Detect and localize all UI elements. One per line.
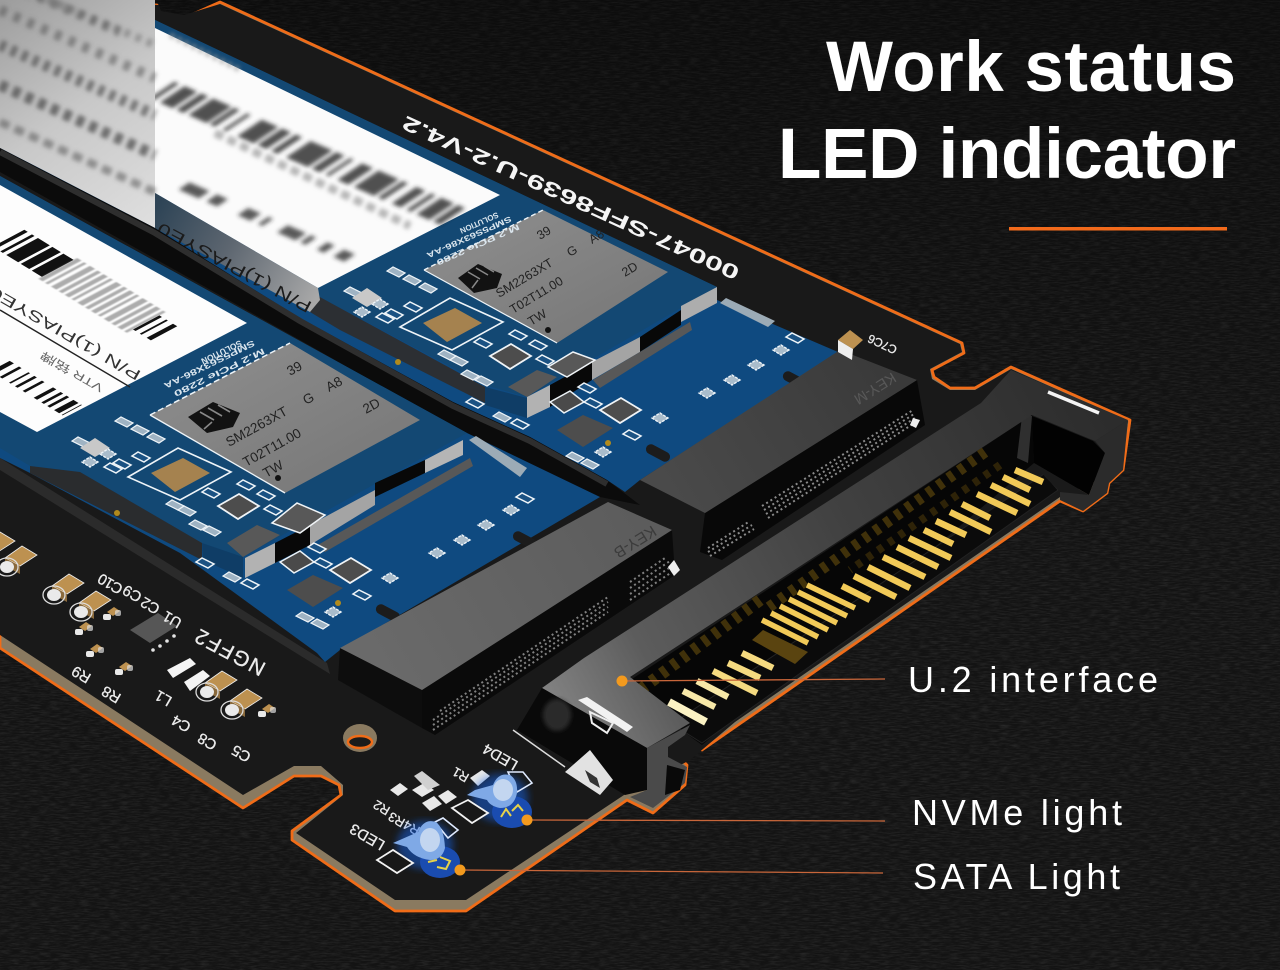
title [778,28,1236,194]
connector latch highlight [668,560,680,576]
sticker [0,185,247,432]
card edge shadow [0,458,330,674]
gold fingers [669,470,1043,722]
upper M.2 SSD card [0,0,838,492]
chip U1 [130,613,177,652]
chip logo [188,402,240,433]
chip markings: TW [260,457,286,481]
connector front [422,530,675,735]
silkscreen labels: C2 [138,593,163,617]
silkscreen labels: U1 [160,607,185,631]
module part text [162,338,267,399]
footprint [377,850,413,873]
module part text: SOLUTION [200,338,244,366]
barcode [0,238,168,410]
body [467,774,517,808]
dark gap [0,148,640,505]
board model text: 00047-SFF8639-U.2-V4.2 [399,111,743,283]
blurred barcodes [162,35,455,258]
connector top bar [542,370,1128,748]
connector front [700,380,925,560]
body [393,821,445,860]
connector latch highlight [910,418,920,428]
module part text: M.2 PCIe 2280 [172,346,267,399]
connector side [338,648,422,728]
left end side [630,725,690,808]
lens [420,846,460,878]
U.2 connector [513,370,1128,808]
silkscreen labels: C5 [229,741,254,765]
finger tongue [672,474,1058,743]
small resistors [75,607,276,717]
silkscreen labels: R3 [386,809,408,830]
module part text: M.2 PCIe 2280 [434,222,521,267]
reflected part number: P/N (1)PIASYE0 [154,219,315,316]
surface mount components [0,330,899,853]
contact dots [433,558,672,730]
sticker [155,28,500,288]
plate side band [30,466,202,560]
callout: U.2 interface [616,659,1158,700]
silkscreen labels: L1 [152,686,175,709]
silkscreen labels: R4 [401,817,422,838]
callout: U.2 interface: U.2 interface [908,659,1158,700]
outlined block [272,503,325,533]
footprint [452,800,488,823]
KEY-B label: KEY-B [610,522,659,561]
chip markings: G [564,243,580,260]
chip edge lines [150,343,290,493]
glow [472,774,528,822]
M-key M.2 connector [640,350,925,560]
callout: SATA Light [454,856,1120,897]
module part text: SOLUTION [458,210,500,235]
KEY-M label: KEY-M [851,369,899,407]
outlined block [548,352,595,377]
resistor pads [390,770,490,811]
connector bump [543,699,571,731]
card lower level [0,176,600,662]
left end front [517,688,647,795]
connector top [340,502,672,690]
chip markings: SM2263XT [493,255,556,301]
silkscreen labels: LED4 [480,740,521,773]
metal clip [565,750,613,795]
chip markings: SM2263XT [223,404,290,450]
chip markings: 39 [534,223,554,243]
white key bar [1048,392,1099,413]
silkscreen labels: R9 [69,662,94,686]
contact reflections [640,452,1000,690]
card upper plate [0,0,717,397]
side slot [665,765,685,795]
card end blue side [202,543,243,578]
controller chip [424,210,668,343]
sticker part number: P/N (1)PIASYE0 [0,283,144,383]
chip markings: T02T11.00 [507,274,566,317]
silkscreen labels: C9 [120,581,145,605]
blurred sticker section [0,0,155,228]
gray corner block [227,525,280,557]
silkscreen labels: C4 [169,711,194,735]
sticker edge band [155,193,320,312]
lens mark [428,857,450,869]
sticker note: VTR 铭牌 [38,348,106,396]
contact dots [708,410,916,556]
silkscreen labels: LED3 [347,820,388,853]
chip markings: A8 [586,227,607,247]
cavity wall [1017,416,1032,463]
lens mark [501,805,523,817]
inductor pads L1 [167,658,210,691]
callout: SATA Light: SATA Light [913,856,1120,897]
card upper plate [0,176,467,557]
chip markings: TW [525,306,549,329]
end slots [275,525,310,563]
slot interior [629,415,1034,745]
white bracket [578,697,633,733]
card lower level [0,0,838,492]
card component details [72,417,539,629]
chip markings: G [300,389,317,408]
chip markings: A8 [323,373,345,395]
gold shadow blob [752,630,808,664]
lower M.2 SSD card [0,148,640,674]
card component details [344,267,809,469]
chip markings: 2D [360,395,383,417]
glow [397,821,453,869]
chip markings [223,358,383,481]
card end blue side [485,387,527,418]
chip markings [493,223,640,329]
B-key M.2 connector [338,502,680,735]
silkscreen labels: R2 [371,797,392,818]
capacitors [0,330,863,719]
chip logo [458,264,502,293]
silkscreen labels: R8 [99,682,124,706]
silkscreen labels [69,331,899,853]
connector top [640,350,917,513]
silkscreen labels: C8 [195,729,220,753]
lens [492,796,532,828]
title: Work status [826,28,1236,107]
plate side band [310,296,485,403]
gray corner block [508,370,557,397]
title: LED indicator [778,115,1236,194]
module part text [425,210,521,267]
right body end [1060,420,1128,511]
end slots [550,362,592,407]
module part text: SMP5S63X86-AA [162,338,257,391]
module part text: SMP5S63X86-AA [425,214,513,260]
silkscreen labels: C7C6 [865,331,899,357]
mounting hole [343,724,377,752]
callout: NVMe light: NVMe light [912,792,1122,833]
chip markings: 2D [619,259,640,280]
SATA LED [377,818,460,878]
controller chip [150,343,420,493]
callout: NVMe light [522,792,1122,833]
title underline [1009,227,1227,230]
silkscreen labels: NGFF2 [191,624,269,680]
chip markings: T02T11.00 [240,425,304,470]
NVMe LED [452,772,532,828]
inner cavity [1032,416,1105,495]
silkscreen labels: R1 [450,764,472,785]
chip edge lines [424,210,557,343]
chip markings: 39 [284,358,305,379]
foot outline [513,730,565,767]
silkscreen labels: C10 [95,570,126,597]
